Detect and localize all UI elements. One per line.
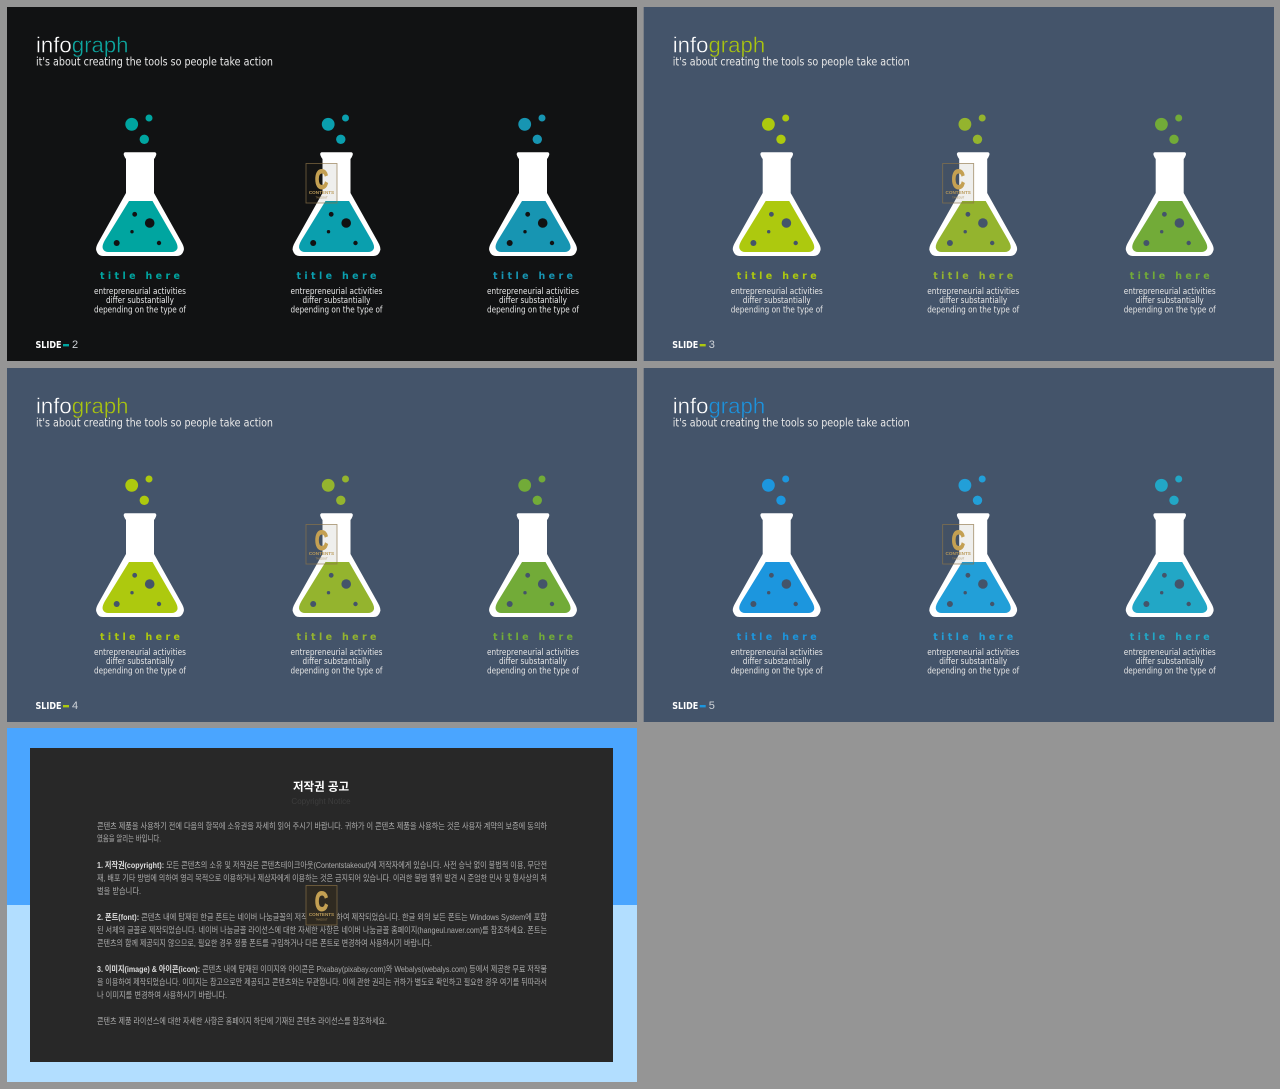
flask 3 text: entrepreneurial activities [1124,287,1216,297]
flask 1 text: depending on the type of [731,306,823,316]
flask 1 text: entrepreneurial activities [94,648,186,658]
flask 1 title: title here [737,632,817,643]
heading: infograph: infograph [673,394,765,418]
flask 2 title: title here [296,632,376,643]
flask 2 [293,114,380,256]
section 3: image and icon: 을 이용하여 제작되었습니다. 이미지는 참고으로만 제공되고 콘텐츠와는 무관합니다. 이에 관한 권리는 귀하가 별도로 확인하고 필요한 경우 여기를 뒤따라서 [97,977,547,987]
slide number: 2 [72,339,78,351]
flask 3 text: differ substantially [1136,657,1204,667]
watermark [306,524,337,564]
flask 2 text: depending on the type of [290,306,383,316]
subtitle: it's about creating the tools so people take action [36,416,273,430]
section 2: font: 콘텐츠의 함께 제공되지 않으므로, 필요한 경우 정품 폰트를 구입하거나 다른 폰트로 변경하여 사용하시기 바랍니다. [97,938,432,948]
heading: infograph: infograph [673,32,765,58]
flask 2 text: entrepreneurial activities [927,648,1019,658]
panel: slide 2 [7,7,637,361]
flask 1 title: title here [737,271,817,282]
flask 3 text [1124,648,1216,676]
slide number: 5 [709,700,715,712]
flask 1 text: depending on the type of [94,666,187,676]
heading: infograph: infograph [36,32,128,58]
section 1: copyright: 벌을 받습니다. [97,886,141,896]
flask 3 text [487,648,580,676]
flask 3 text [487,287,580,316]
heading: infograph: infograph [36,394,128,418]
flask 1 text: depending on the type of [731,666,823,676]
flask 2 text: differ substantially [302,657,371,667]
flask 1 text: entrepreneurial activities [731,648,823,658]
flask 3 text: differ substantially [499,657,568,667]
flask 1 [96,476,184,617]
slide number: SLIDE [672,701,698,712]
subtitle: it's about creating the tools so people take action [673,54,910,68]
flask 1 text: differ substantially [743,296,811,306]
panel: slide 4 [7,368,637,722]
flask 2 text: differ substantially [302,296,371,306]
flask 3 text: depending on the type of [1124,306,1216,316]
slide number: 3 [709,339,715,351]
intro text: 콘텐츠 제품을 사용하기 전에 다음의 항목에 소유권을 자세히 읽어 주시기 바랍니다. 귀하가 이 콘텐츠 제품을 사용하는 것은 사용자 계약의 보증에 동의하 [97,821,547,831]
flask 2 text [927,287,1020,316]
license note: 콘텐츠 제품 라이선스에 대한 자세한 사항은 홈페이지 하단에 기재된 콘텐츠 라이선스를 참조하세요. [97,1016,387,1026]
section 3: image and icon [97,964,547,1000]
flask 3 [1126,114,1214,256]
section 3: image and icon: 나 이미지를 변경하여 사용하시기 바랍니다. [97,990,227,1000]
flask 1 text [94,287,187,316]
slide number: SLIDE [36,340,62,351]
flask 2 title: title here [933,271,1013,282]
slide number: SLIDE [36,701,62,712]
section 1: copyright: 재, 배포 기타 방법에 의하여 영리 목적으로 이용하거나 제삼자에게 이용하는 것은 금지되어 있습니다. 이러한 불법 행위 발견 시 준엄한 민사 및 형사상의 처 [97,873,547,883]
flask 3 text: depending on the type of [1124,666,1216,676]
flask 3 title: title here [1130,632,1210,643]
flask 1 text [731,648,823,676]
flask 1 text [731,287,823,316]
slide number [36,700,78,712]
flask 1 text: differ substantially [106,296,175,306]
flask 3 text: differ substantially [499,296,568,306]
flask 3 text: depending on the type of [487,666,580,676]
flask 1 text: entrepreneurial activities [731,287,823,297]
section 2: font: 2. 폰트(font): 콘텐츠 내에 탑재된 한글 폰트는 네이버 나눔글꼴의 저작물을 사용하여 제작되었습니다. 한글 외의 보든 폰트는 Windows System에 포함 [97,912,547,922]
flask 2 text: depending on the type of [290,666,383,676]
section 1: copyright: 1. 저작권(copyright): 모든 콘텐츠의 소유 및 저작권은 콘텐츠테이크아웃(Contentstakeout)에 저작자에게 있습니다. 사전 승낙 없이 불법적 이용, 무단전 [97,860,547,870]
watermark [306,164,337,203]
slide number: 4 [72,700,78,712]
panel: slide 5 [644,368,1274,722]
flask 3 text: entrepreneurial activities [1124,648,1216,658]
flask 1 [733,476,821,617]
flask 2 [293,476,380,617]
slide number [36,339,78,351]
section 1: copyright [97,860,547,896]
watermark [943,164,974,203]
flask 3 text: entrepreneurial activities [487,648,579,658]
flask 2 title: title here [933,632,1013,643]
flask 1 [733,114,821,256]
flask 2 [929,476,1017,617]
flask 2 text [290,287,383,316]
section 2: font [97,912,547,948]
subtitle: it's about creating the tools so people take action [673,416,910,430]
section 2: font: 된 서체의 글꼴로 제작되었습니다. 네이버 나눔글꼴 라이선스에 대한 자세한 사항은 네이버 나눔글꼴 홈페이지(hangeul.naver.com)를 참조하세요. 폰트는 [97,925,547,935]
panel: slide 3 [644,7,1274,361]
slide number [672,339,715,351]
watermark [943,524,974,564]
flask 3 title: title here [1130,271,1210,282]
watermark [306,885,337,925]
flask 2 text [290,648,383,676]
flask 1 title: title here [100,632,180,643]
flask 2 text: differ substantially [939,657,1008,667]
flask 3 title: title here [493,632,573,643]
flask 2 text: entrepreneurial activities [927,287,1019,297]
flask 3 text: differ substantially [1136,296,1204,306]
flask 3 text: entrepreneurial activities [487,287,579,297]
flask 3 [489,114,577,256]
flask 2 text: entrepreneurial activities [290,648,383,658]
flask 1 text: depending on the type of [94,306,187,316]
slide number [672,700,715,712]
flask 2 title: title here [296,271,376,282]
flask 3 title: title here [493,271,573,282]
slide number: SLIDE [672,340,698,351]
flask 2 text: differ substantially [939,296,1008,306]
flask 1 text: differ substantially [743,657,811,667]
flask 2 text: entrepreneurial activities [290,287,383,297]
flask 2 text: depending on the type of [927,666,1020,676]
heading: copyright title: 저작권 공고 [293,780,349,794]
flask 2 text: depending on the type of [927,306,1020,316]
flask 3 text: depending on the type of [487,306,580,316]
panel: copyright notice [7,728,637,1082]
flask 1 text [94,648,187,676]
flask 1 text: entrepreneurial activities [94,287,186,297]
flask 2 text [927,648,1020,676]
flask 1 title: title here [100,271,180,282]
flask 3 [489,476,577,617]
intro text [97,821,547,844]
flask 2 [929,114,1017,256]
intro text: 였음을 알리는 바입니다. [97,834,161,844]
flask 3 [1126,476,1214,617]
flask 1 [96,114,184,256]
section 3: image and icon: 3. 이미지(image) & 아이콘(icon): 콘텐츠 내에 탑재된 이미지와 아이콘은 Pixabay(pixabay.com)와 Webalys(webalys.com) 등에서 제공한 무료 저작물 [97,964,547,974]
subtitle: it's about creating the tools so people take action [36,54,273,68]
subheading: copyright notice: Copyright Notice [291,797,351,806]
flask 3 text [1124,287,1216,316]
flask 1 text: differ substantially [106,657,175,667]
